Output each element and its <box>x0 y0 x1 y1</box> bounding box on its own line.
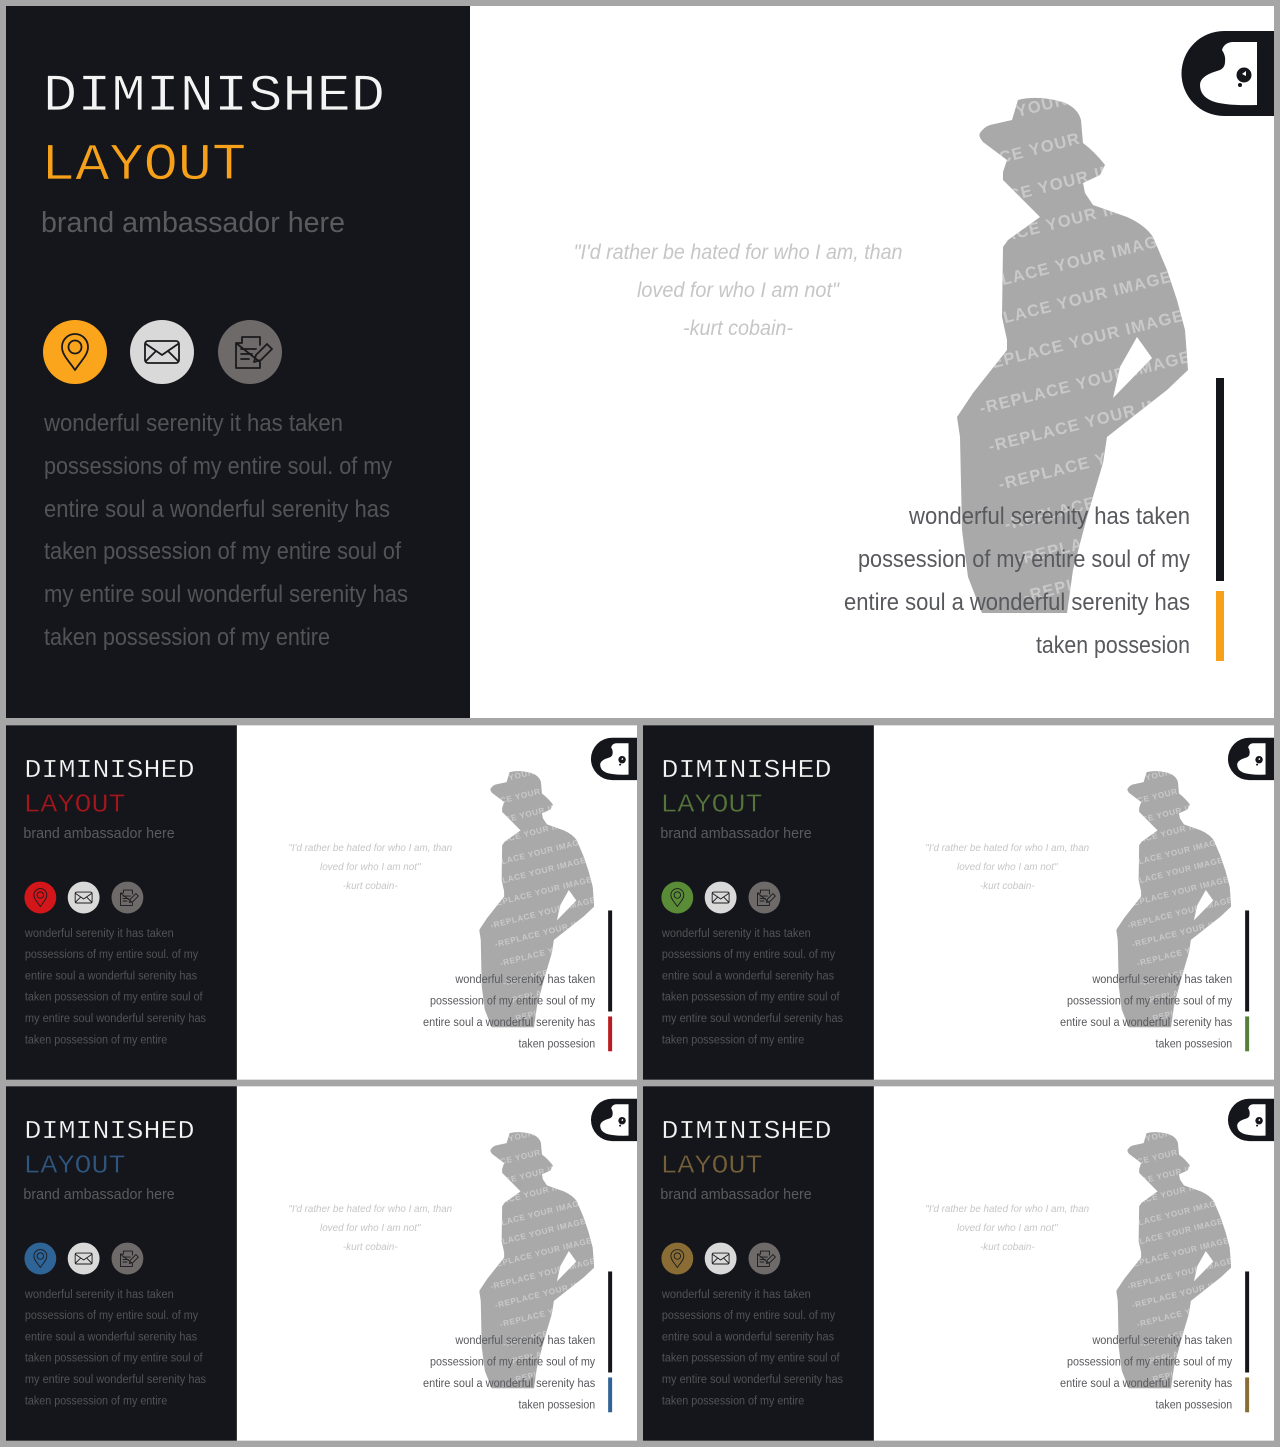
subtitle: brand ambassador here <box>23 826 175 842</box>
quote: -kurt cobain- <box>343 881 398 892</box>
silhouette placeholder: -REPLACE YOUR IMAGE- <box>1003 462 1225 534</box>
right text block <box>1060 1333 1233 1411</box>
silhouette placeholder: -REPLACE YOUR IMAGE- <box>971 305 1193 377</box>
quote: "I'd rather be hated for who I am, than <box>574 241 902 264</box>
silhouette placeholder: -REPLACE YOUR IMAGE- <box>1131 913 1241 949</box>
accent bars <box>608 1271 612 1412</box>
silhouette placeholder: -REPLACE YOUR IMAGE- <box>1015 497 1237 569</box>
right text block: entire soul a wonderful serenity has <box>844 589 1190 616</box>
right text block: possession of my entire soul of my <box>1067 1355 1233 1369</box>
silhouette placeholder: -REPLACE YOUR IMAGE- <box>508 1331 618 1366</box>
silhouette placeholder: -REPLACE YOUR IMAGE- <box>502 1313 612 1349</box>
body text: my entire soul wonderful serenity has <box>25 1372 206 1386</box>
subtitle: brand ambassador here <box>660 1187 812 1203</box>
right text block: wonderful serenity has taken <box>454 972 595 986</box>
silhouette placeholder: -REPLACE YOUR IMAGE- <box>499 932 609 968</box>
silhouette placeholder <box>479 771 594 1028</box>
body text: taken possession of my entire soul of <box>44 538 401 565</box>
silhouette placeholder: -REPLACE YOUR IMAGE- <box>987 384 1209 456</box>
silhouette placeholder: -REPLACE YOUR IMAGE- <box>1145 1331 1255 1366</box>
body text: wonderful serenity it has taken <box>661 926 811 940</box>
silhouette placeholder: -REPLACE YOUR IMAGE- <box>1116 836 1227 872</box>
title <box>23 1117 195 1181</box>
silhouette placeholder: -REPLACE YOUR IMAGE- <box>471 1158 581 1194</box>
silhouette placeholder: -REPLACE YOUR IMAGE- <box>1116 1197 1227 1233</box>
title: DIMINISHED <box>43 68 385 126</box>
silhouette placeholder: -REPLACE YOUR IMAGE- <box>466 778 577 814</box>
silhouette placeholder: -REPLACE YOUR IMAGE- <box>948 187 1170 259</box>
title: LAYOUT <box>23 1151 126 1181</box>
quote: -kurt cobain- <box>980 881 1035 892</box>
accent bars <box>608 910 612 1051</box>
silhouette placeholder: -REPLACE YOUR IMAGE- <box>499 1293 609 1329</box>
right text block: entire soul a wonderful serenity has <box>423 1015 595 1029</box>
quote: "I'd rather be hated for who I am, than <box>288 1204 452 1215</box>
title: LAYOUT <box>41 137 246 195</box>
right white panel <box>470 6 1274 718</box>
body text <box>43 410 408 651</box>
left dark panel <box>6 1086 237 1441</box>
quote <box>925 1204 1089 1253</box>
quote <box>574 241 902 340</box>
body text: taken possession of my entire <box>25 1032 167 1046</box>
silhouette placeholder <box>1116 771 1232 1028</box>
right text block: possession of my entire soul of my <box>430 1355 596 1369</box>
silhouette placeholder: -REPLACE YOUR IMAGE- <box>1136 1293 1246 1329</box>
silhouette placeholder: -REPLACE YOUR IMAGE- <box>1148 988 1259 1024</box>
body text: taken possession of my entire <box>662 1393 804 1407</box>
quote: loved for who I am not" <box>957 1223 1059 1234</box>
title <box>41 68 385 195</box>
body text: possessions of my entire soul. of my <box>44 453 393 480</box>
body text: taken possession of my entire soul of <box>25 1351 203 1365</box>
silhouette placeholder: -REPLACE YOUR IMAGE- <box>1148 1349 1259 1385</box>
right white panel <box>874 1086 1274 1441</box>
silhouette placeholder: -REPLACE YOUR IMAGE- <box>1139 952 1249 988</box>
right text block: wonderful serenity has taken <box>454 1333 595 1347</box>
logo <box>1228 738 1274 780</box>
left dark panel <box>643 1086 874 1441</box>
panel: brown variant <box>643 1086 1274 1441</box>
icon: envelope <box>705 1243 737 1274</box>
left dark panel <box>643 725 874 1080</box>
accent bars <box>1245 910 1249 1051</box>
silhouette placeholder: -REPLACE YOUR IMAGE- <box>475 815 585 851</box>
quote: -kurt cobain- <box>683 317 793 340</box>
right text block: entire soul a wonderful serenity has <box>1060 1015 1232 1029</box>
silhouette placeholder: -REPLACE YOUR IMAGE- <box>940 150 1162 222</box>
silhouette placeholder: -REPLACE YOUR IMAGE- <box>479 1197 590 1233</box>
silhouette placeholder: -REPLACE YOUR IMAGE- <box>1108 797 1218 833</box>
icon: location pin <box>24 882 56 913</box>
silhouette placeholder: -REPLACE YOUR IMAGE- <box>494 913 604 949</box>
silhouette placeholder: -REPLACE YOUR IMAGE- <box>1112 815 1222 851</box>
right white panel <box>874 725 1274 1080</box>
body text: taken possession of my entire soul of <box>662 990 840 1004</box>
silhouette placeholder: -REPLACE YOUR IMAGE- <box>918 73 1140 145</box>
quote: "I'd rather be hated for who I am, than <box>288 843 452 854</box>
silhouette placeholder: -REPLACE YOUR IMAGE- <box>1123 874 1233 910</box>
title: LAYOUT <box>23 790 126 820</box>
logo <box>1182 31 1274 116</box>
right text block <box>423 1333 596 1411</box>
right text block: possession of my entire soul of my <box>858 546 1191 573</box>
panel: blue variant <box>6 1086 637 1441</box>
body text: my entire soul wonderful serenity has <box>662 1372 843 1386</box>
silhouette placeholder: -REPLACE YOUR IMAGE- <box>489 1256 600 1291</box>
title: LAYOUT <box>660 1151 763 1181</box>
right text block: taken possesion <box>519 1397 595 1411</box>
silhouette placeholder: -REPLACE YOUR IMAGE- <box>997 422 1219 494</box>
body text: entire soul a wonderful serenity has <box>44 496 390 523</box>
silhouette placeholder: -REPLACE YOUR IMAGE- <box>1136 932 1246 968</box>
silhouette placeholder: -REPLACE YOUR IMAGE- <box>931 112 1153 184</box>
logo <box>591 1099 637 1141</box>
silhouette placeholder: -REPLACE YOUR IMAGE- <box>1126 895 1237 930</box>
icon: envelope <box>130 320 194 384</box>
body text: possessions of my entire soul. of my <box>25 1308 199 1322</box>
right text block: entire soul a wonderful serenity has <box>423 1376 595 1390</box>
body text <box>24 1287 206 1407</box>
silhouette placeholder: -REPLACE YOUR IMAGE- <box>508 970 618 1005</box>
quote: loved for who I am not" <box>320 1223 422 1234</box>
icon: document with pencil <box>748 1243 780 1274</box>
quote: loved for who I am not" <box>320 862 422 873</box>
body text: possessions of my entire soul. of my <box>25 947 199 961</box>
silhouette placeholder: -REPLACE YOUR IMAGE- <box>475 1176 585 1212</box>
body text: taken possession of my entire soul of <box>662 1351 840 1365</box>
body text: my entire soul wonderful serenity has <box>44 581 408 608</box>
body text: entire soul a wonderful serenity has <box>662 969 834 983</box>
right text block: possession of my entire soul of my <box>430 994 596 1008</box>
silhouette placeholder: -REPLACE YOUR IMAGE- <box>1097 1120 1207 1155</box>
icon: location pin <box>43 320 107 384</box>
silhouette placeholder: -REPLACE YOUR IMAGE- <box>480 855 591 891</box>
silhouette placeholder: -REPLACE YOUR IMAGE- <box>957 228 1179 300</box>
panel: red variant <box>6 725 637 1080</box>
left dark panel <box>6 725 237 1080</box>
logo <box>1228 1099 1274 1141</box>
title: DIMINISHED <box>661 756 832 786</box>
quote: -kurt cobain- <box>980 1242 1035 1253</box>
quote: "I'd rather be hated for who I am, than <box>925 843 1089 854</box>
silhouette placeholder: -REPLACE YOUR IMAGE- <box>1117 1216 1228 1252</box>
silhouette placeholder: -REPLACE YOUR IMAGE- <box>1123 1235 1233 1271</box>
silhouette placeholder <box>1116 1132 1232 1388</box>
silhouette placeholder: -REPLACE YOUR IMAGE- <box>466 1139 577 1175</box>
right text block: taken possesion <box>519 1036 595 1050</box>
silhouette placeholder: -REPLACE YOUR IMAGE- <box>1103 1139 1214 1175</box>
title: LAYOUT <box>660 790 763 820</box>
quote: "I'd rather be hated for who I am, than <box>925 1204 1089 1215</box>
right white panel <box>237 1086 637 1441</box>
silhouette placeholder: -REPLACE YOUR IMAGE- <box>1126 1256 1237 1291</box>
title <box>23 756 195 820</box>
silhouette placeholder: -REPLACE YOUR IMAGE- <box>486 874 596 910</box>
right text block: taken possesion <box>1036 632 1190 659</box>
right text block: entire soul a wonderful serenity has <box>1060 1376 1232 1390</box>
body text: taken possession of my entire <box>44 624 330 651</box>
silhouette placeholder <box>957 98 1188 613</box>
subtitle: brand ambassador here <box>660 826 812 842</box>
silhouette placeholder: -REPLACE YOUR IMAGE- <box>1139 1313 1249 1349</box>
subtitle: brand ambassador here <box>41 207 345 239</box>
quote: -kurt cobain- <box>343 1242 398 1253</box>
body text: taken possession of my entire soul of <box>25 990 203 1004</box>
icon: envelope <box>68 882 100 913</box>
silhouette placeholder: -REPLACE YOUR IMAGE- <box>479 836 590 872</box>
silhouette placeholder <box>479 1132 594 1388</box>
body text: taken possession of my entire <box>25 1393 167 1407</box>
body text: my entire soul wonderful serenity has <box>662 1011 843 1025</box>
right text block: taken possesion <box>1156 1036 1232 1050</box>
silhouette placeholder: -REPLACE YOUR IMAGE- <box>1103 778 1214 814</box>
silhouette placeholder: -REPLACE YOUR IMAGE- <box>959 266 1181 338</box>
right text block <box>1060 972 1233 1050</box>
icon: envelope <box>68 1243 100 1274</box>
body text <box>661 1287 843 1407</box>
quote <box>925 843 1089 892</box>
icon: document with pencil <box>111 882 143 913</box>
body text: my entire soul wonderful serenity has <box>25 1011 206 1025</box>
body text <box>661 926 843 1046</box>
right text block: wonderful serenity has taken <box>1091 1333 1232 1347</box>
body text: entire soul a wonderful serenity has <box>662 1330 834 1344</box>
title: DIMINISHED <box>24 756 195 786</box>
right text block: taken possesion <box>1156 1397 1232 1411</box>
right text block <box>423 972 596 1050</box>
panel: green variant <box>643 725 1274 1080</box>
silhouette placeholder: -REPLACE YOUR IMAGE- <box>1112 1176 1222 1212</box>
body text: possessions of my entire soul. of my <box>662 947 836 961</box>
quote: loved for who I am not" <box>957 862 1059 873</box>
silhouette placeholder: -REPLACE YOUR IMAGE- <box>978 346 1200 418</box>
icon: location pin <box>661 1243 693 1274</box>
body text: entire soul a wonderful serenity has <box>25 969 197 983</box>
silhouette placeholder: -REPLACE YOUR IMAGE- <box>1145 970 1255 1005</box>
right text block: wonderful serenity has taken <box>1091 972 1232 986</box>
icon: document with pencil <box>218 320 282 384</box>
right text block <box>844 503 1191 659</box>
body text: wonderful serenity it has taken <box>661 1287 811 1301</box>
body text: possessions of my entire soul. of my <box>662 1308 836 1322</box>
silhouette placeholder: -REPLACE YOUR IMAGE- <box>1131 1274 1241 1310</box>
body text: entire soul a wonderful serenity has <box>25 1330 197 1344</box>
silhouette placeholder: -REPLACE YOUR IMAGE- <box>1117 855 1228 891</box>
silhouette placeholder: -REPLACE YOUR IMAGE- <box>1097 759 1207 794</box>
silhouette placeholder: -REPLACE YOUR IMAGE- <box>502 952 612 988</box>
icon: document with pencil <box>748 882 780 913</box>
right text block: wonderful serenity has taken <box>908 503 1190 530</box>
silhouette placeholder: -REPLACE YOUR IMAGE- <box>511 988 622 1024</box>
icon: location pin <box>24 1243 56 1274</box>
body text: wonderful serenity it has taken <box>24 1287 174 1301</box>
quote: loved for who I am not" <box>637 279 840 302</box>
silhouette placeholder: -REPLACE YOUR IMAGE- <box>1108 1158 1218 1194</box>
silhouette placeholder: -REPLACE YOUR IMAGE- <box>489 895 600 930</box>
title: DIMINISHED <box>24 1117 195 1147</box>
accent bars <box>1245 1271 1249 1412</box>
title <box>660 756 832 820</box>
body text: wonderful serenity it has taken <box>43 410 343 437</box>
icon: envelope <box>705 882 737 913</box>
right text block: possession of my entire soul of my <box>1067 994 1233 1008</box>
silhouette placeholder: -REPLACE YOUR IMAGE- <box>471 797 581 833</box>
silhouette placeholder: -REPLACE YOUR IMAGE- <box>511 1349 622 1385</box>
silhouette placeholder: -REPLACE YOUR IMAGE- <box>460 1120 570 1155</box>
quote <box>288 843 452 892</box>
silhouette placeholder: -REPLACE YOUR IMAGE- <box>486 1235 596 1271</box>
body text: wonderful serenity it has taken <box>24 926 174 940</box>
title <box>660 1117 832 1181</box>
silhouette placeholder: -REPLACE YOUR IMAGE- <box>1022 534 1244 606</box>
silhouette placeholder: -REPLACE YOUR IMAGE- <box>480 1216 591 1252</box>
icon: location pin <box>661 882 693 913</box>
quote <box>288 1204 452 1253</box>
title: DIMINISHED <box>661 1117 832 1147</box>
silhouette placeholder: -REPLACE YOUR IMAGE- <box>494 1274 604 1310</box>
left dark panel <box>6 6 470 718</box>
body text: taken possession of my entire <box>662 1032 804 1046</box>
accent bars <box>1216 378 1224 661</box>
subtitle: brand ambassador here <box>23 1187 175 1203</box>
icon: document with pencil <box>111 1243 143 1274</box>
panel: main slide orange <box>6 6 1274 718</box>
body text <box>24 926 206 1046</box>
silhouette placeholder: -REPLACE YOUR IMAGE- <box>460 759 570 794</box>
right white panel <box>237 725 637 1080</box>
logo <box>591 738 637 780</box>
